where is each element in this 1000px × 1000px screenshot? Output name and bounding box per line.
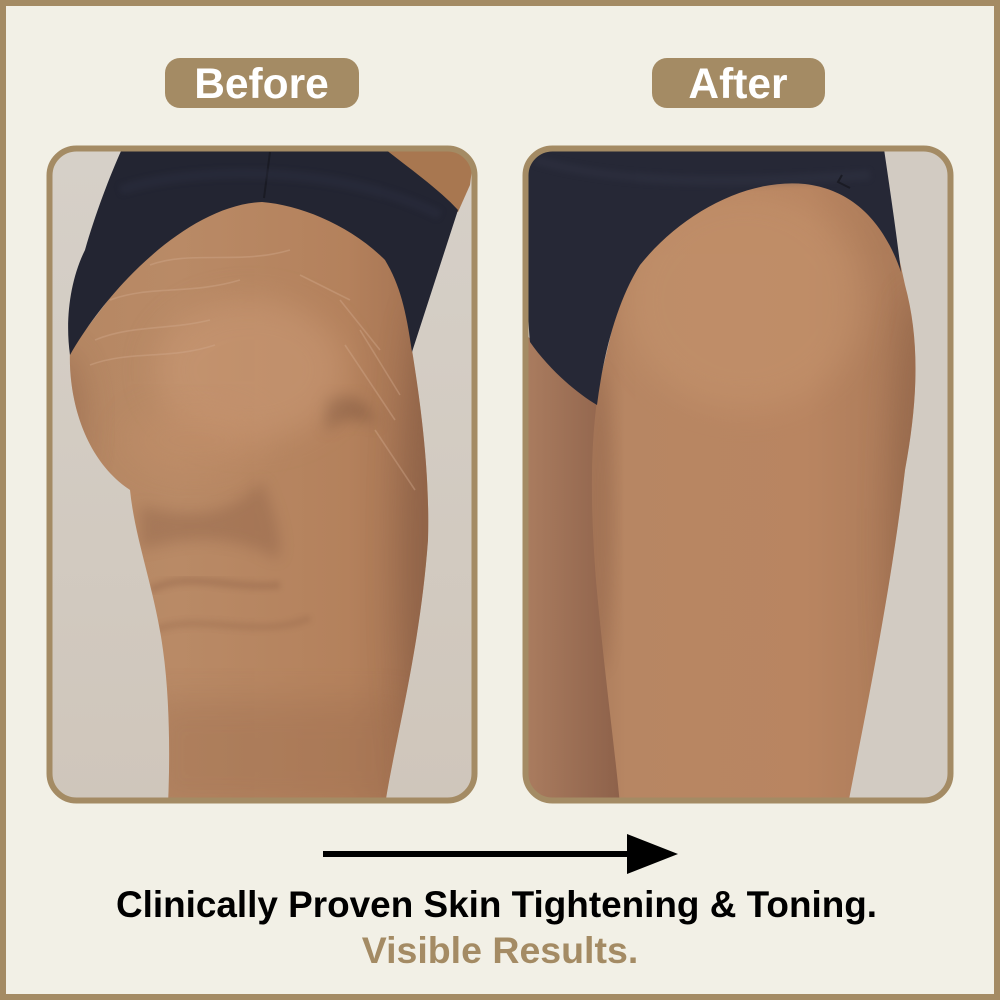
label: After <box>652 58 825 108</box>
underwear <box>68 149 458 355</box>
panel: before photo <box>35 145 475 820</box>
label: After: After <box>688 61 788 108</box>
arrow <box>323 834 678 874</box>
label: Before: Before <box>194 61 329 108</box>
near thigh <box>592 183 916 798</box>
label: Before <box>165 58 359 108</box>
thigh and buttock <box>70 202 428 798</box>
underwear <box>527 149 901 405</box>
upper body skin behind waistband <box>388 152 472 212</box>
before photo frame <box>50 148 474 800</box>
far leg <box>526 335 625 805</box>
headline: Clinically Proven Skin Tightening & Toning. <box>116 884 877 925</box>
subheadline: Visible Results. <box>362 929 638 971</box>
after photo frame <box>526 148 950 800</box>
panel: after photo <box>526 149 951 809</box>
